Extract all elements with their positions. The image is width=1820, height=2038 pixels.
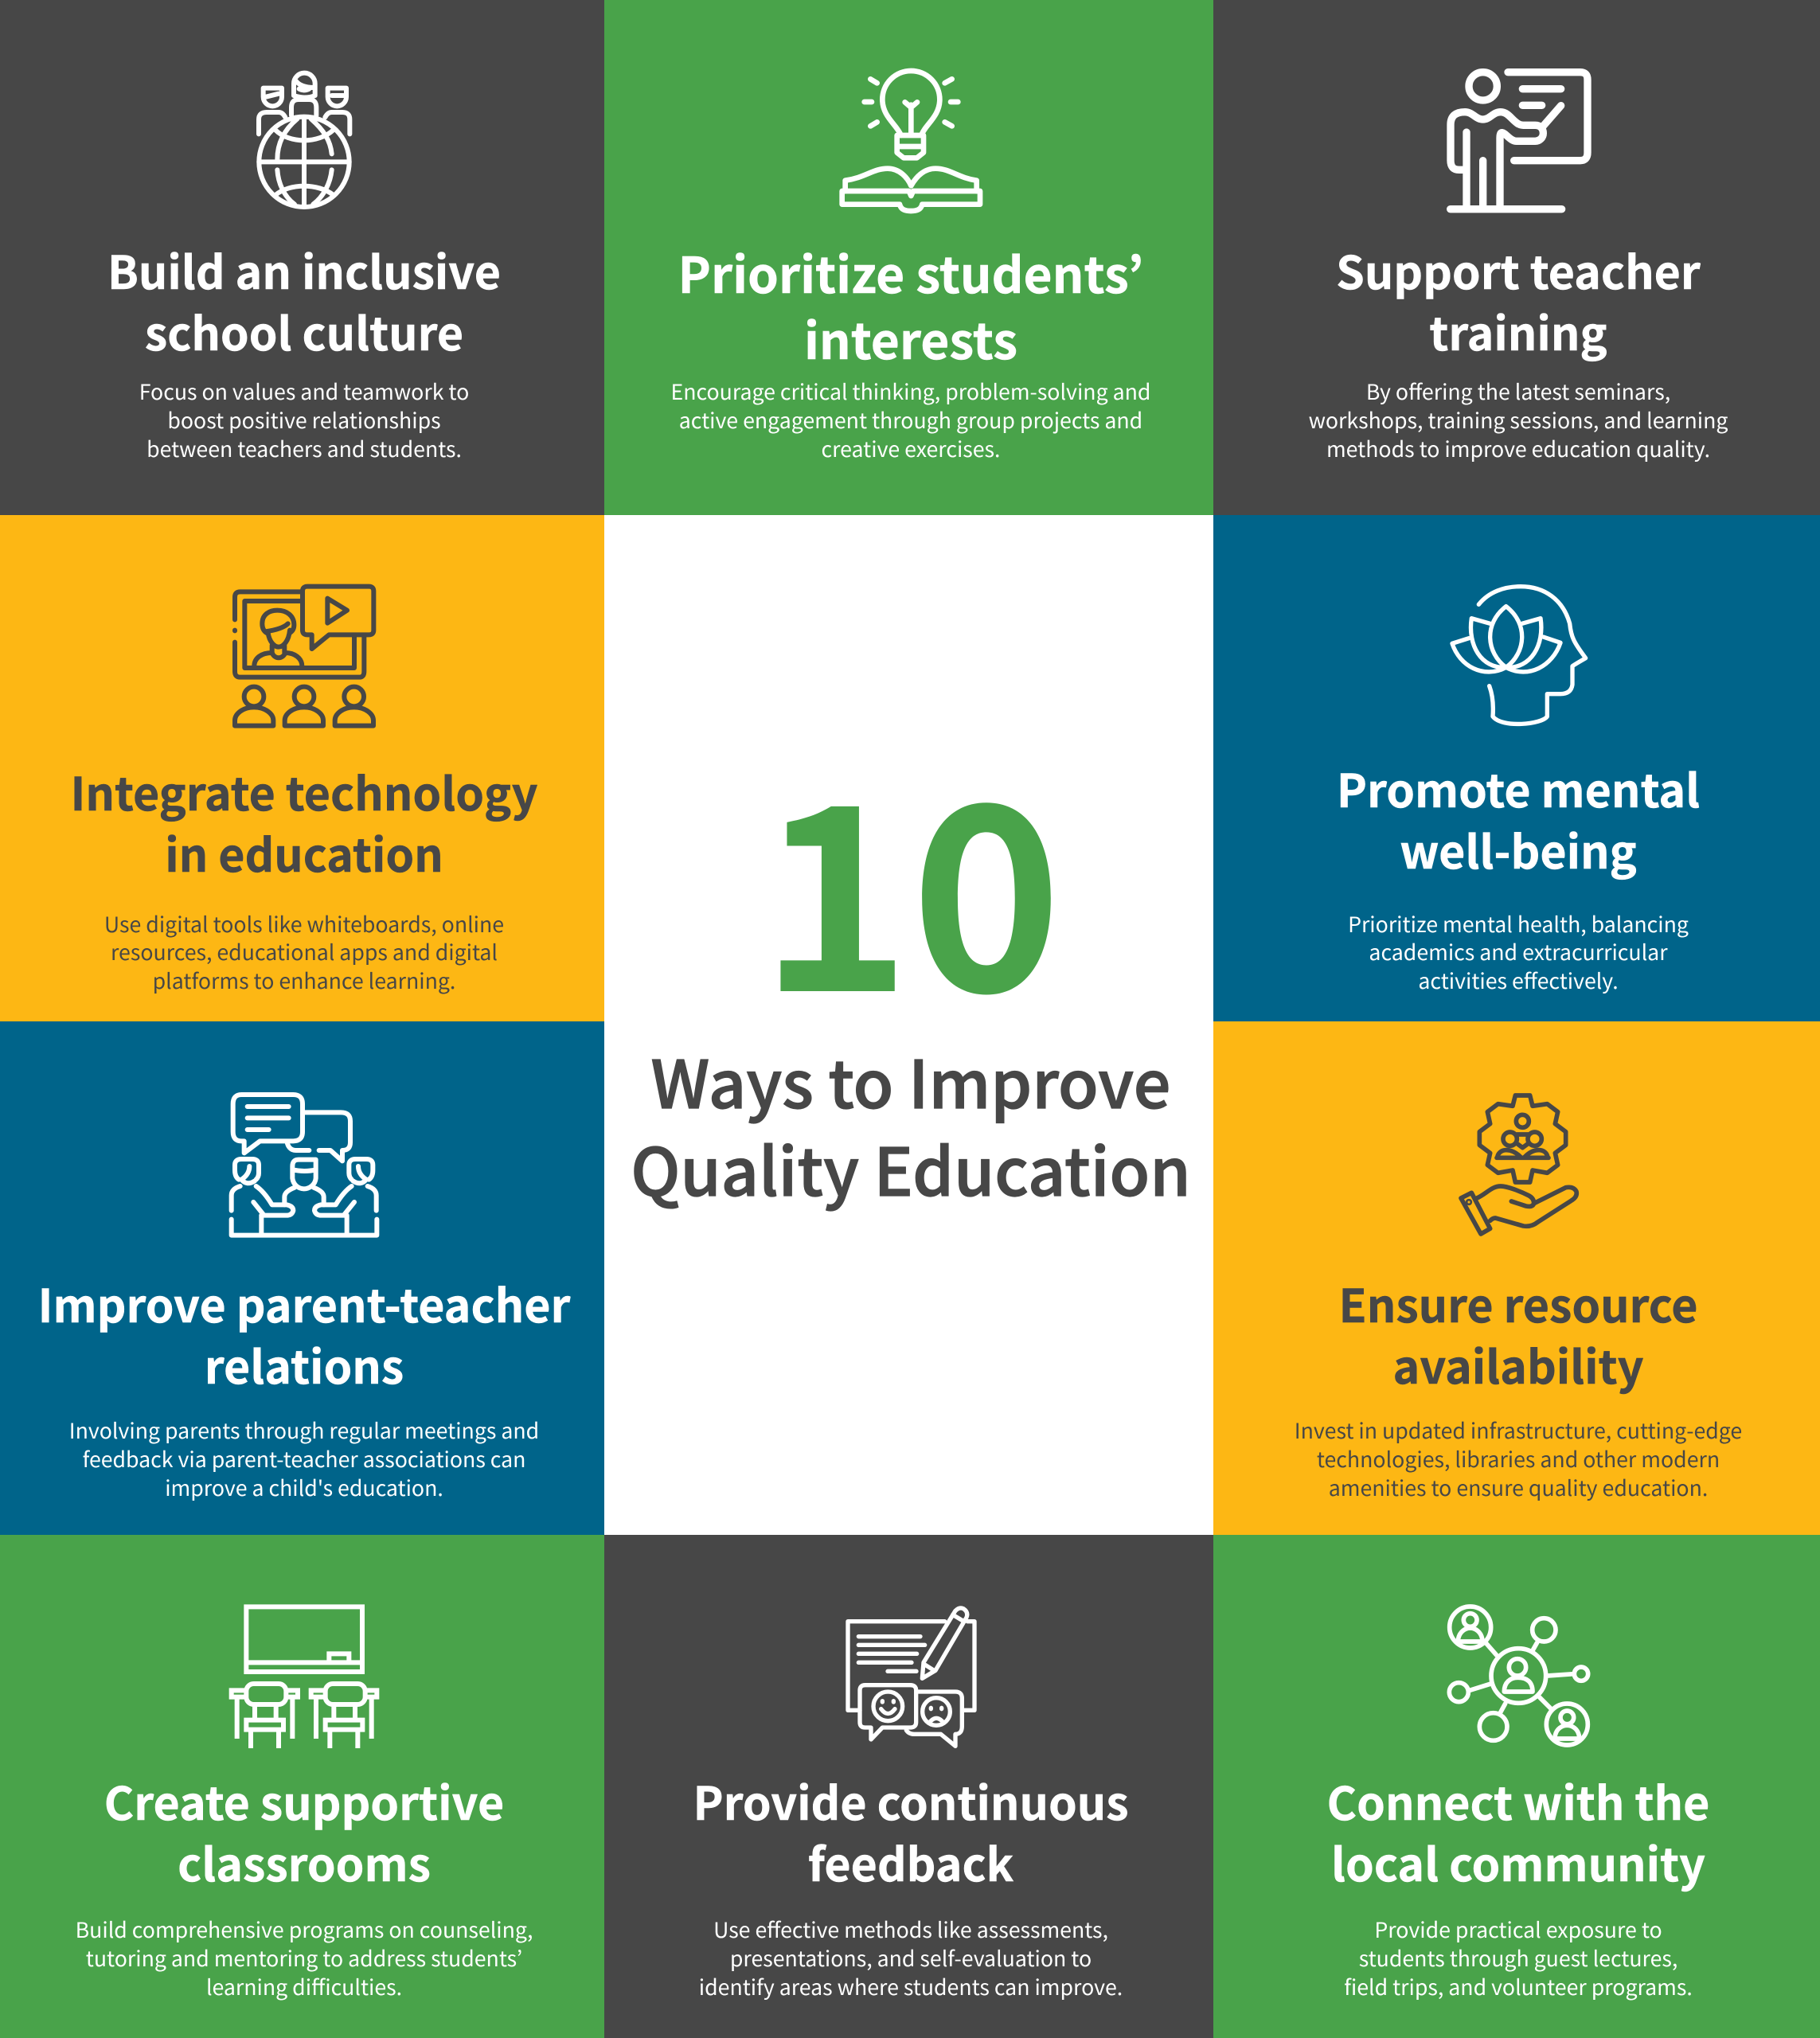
text block: Invest in updated infrastructure, cutting-edge (1295, 1414, 1742, 1445)
text block (1309, 375, 1728, 463)
heading: Promote mental (1337, 755, 1700, 821)
text block: creative exercises. (822, 432, 1000, 463)
panel: integrate technology in education (0, 515, 604, 1021)
heading: local community (1331, 1829, 1705, 1895)
heading (107, 237, 501, 363)
main title (631, 1032, 1191, 1215)
text block: active engagement through group projects and (679, 404, 1142, 435)
text block: workshops, training sessions, and learning (1309, 404, 1728, 435)
heading: Build an inclusive (107, 237, 501, 303)
text block: Build comprehensive programs on counseling, (76, 1913, 533, 1944)
heading: availability (1393, 1331, 1643, 1396)
icon: paper, pencil and emoji bubbles (846, 1606, 977, 1748)
heading (1336, 237, 1701, 363)
heading: Integrate technology (71, 759, 537, 824)
heading (38, 1271, 571, 1396)
text block: platforms to enhance learning. (153, 964, 455, 995)
text block: tutoring and mentoring to address students’ (86, 1942, 522, 1973)
heading: in education (165, 820, 443, 885)
text block: learning difficulties. (206, 1970, 402, 2001)
heading: Connect with the (1327, 1768, 1709, 1833)
heading: Improve parent-teacher (38, 1271, 570, 1336)
text block: boost positive relationships (167, 404, 441, 435)
text block: students through guest lectures, (1359, 1942, 1677, 1973)
text block: Provide practical exposure to (1374, 1913, 1662, 1944)
text block (139, 375, 469, 463)
panel: provide continuous feedback (604, 1535, 1213, 2038)
icon: head with lotus (1450, 584, 1588, 726)
heading: relations (205, 1331, 404, 1396)
text block: identify areas where students can improve. (699, 1970, 1123, 2001)
heading: interests (804, 301, 1017, 373)
big number 10: 10 (760, 693, 1062, 1065)
heading: feedback (808, 1829, 1013, 1895)
text block: presentations, and self-evaluation to (730, 1942, 1092, 1973)
text block: improve a child's education. (165, 1471, 443, 1502)
main title: Ways to Improve (651, 1032, 1170, 1127)
heading (71, 759, 537, 885)
icon: video lesson with audience (232, 584, 376, 728)
text block: technologies, libraries and other modern (1317, 1443, 1720, 1474)
heading: classrooms (178, 1829, 431, 1895)
text block (1344, 1913, 1693, 2001)
heading: Prioritize students’ (678, 236, 1143, 307)
heading (678, 236, 1143, 373)
text block (104, 908, 504, 995)
icon: parents and teacher talking (229, 1092, 379, 1238)
heading (1337, 755, 1700, 882)
text block (699, 1913, 1123, 2001)
heading (1327, 1768, 1709, 1895)
text block: resources, educational apps and digital (111, 935, 498, 966)
icon: chalkboard and desks (229, 1604, 379, 1748)
text block: amenities to ensure quality education. (1329, 1471, 1708, 1502)
text block (1295, 1414, 1742, 1502)
panel: promote mental well-being (1213, 515, 1820, 1021)
text block (1348, 908, 1689, 995)
main title: Quality Education (631, 1119, 1191, 1215)
panel: build an inclusive school culture (0, 0, 604, 515)
panel: prioritize students' interests (604, 0, 1213, 515)
heading: training (1429, 298, 1607, 363)
text block: Involving parents through regular meetings and (69, 1414, 539, 1445)
icon: people network (1447, 1604, 1591, 1747)
heading (104, 1768, 504, 1895)
icon: light bulb over book (839, 68, 982, 213)
text block: Use digital tools like whiteboards, online (104, 908, 504, 938)
text block (69, 1414, 539, 1502)
heading: Provide continuous (693, 1768, 1129, 1833)
heading: Support teacher (1336, 237, 1701, 303)
panel: improve parent-teacher relations (0, 1021, 604, 1535)
text block: By offering the latest seminars, (1366, 375, 1670, 406)
text block (671, 375, 1150, 463)
panel: create supportive classrooms (0, 1535, 604, 2038)
panel: connect with the local community (1213, 1535, 1820, 2038)
panel: ensure resource availability (1213, 1021, 1820, 1535)
icon: teacher at board (1447, 68, 1592, 213)
text block: feedback via parent-teacher associations can (83, 1443, 525, 1474)
text block: Prioritize mental health, balancing (1348, 908, 1689, 938)
text block: methods to improve education quality. (1326, 432, 1710, 463)
heading: Create supportive (104, 1768, 504, 1833)
heading: school culture (145, 298, 463, 363)
text block: Use effective methods like assessments, (713, 1913, 1108, 1944)
heading (693, 1768, 1129, 1895)
text block: between teachers and students. (146, 432, 462, 463)
icon: globe with people (256, 70, 352, 209)
text block: Focus on values and teamwork to (139, 375, 469, 406)
text block: academics and extracurricular (1369, 935, 1668, 966)
heading: Ensure resource (1339, 1271, 1697, 1336)
text block: Encourage critical thinking, problem-solving and (671, 375, 1150, 406)
text block: field trips, and volunteer programs. (1344, 1970, 1693, 2001)
text block (76, 1913, 533, 2001)
heading (1339, 1271, 1697, 1396)
heading: well-being (1400, 817, 1637, 882)
icon: gear with people over hand (1459, 1093, 1580, 1236)
panel: title (604, 515, 1213, 1535)
text block: activities effectively. (1418, 964, 1619, 995)
panel: support teacher training (1213, 0, 1820, 515)
